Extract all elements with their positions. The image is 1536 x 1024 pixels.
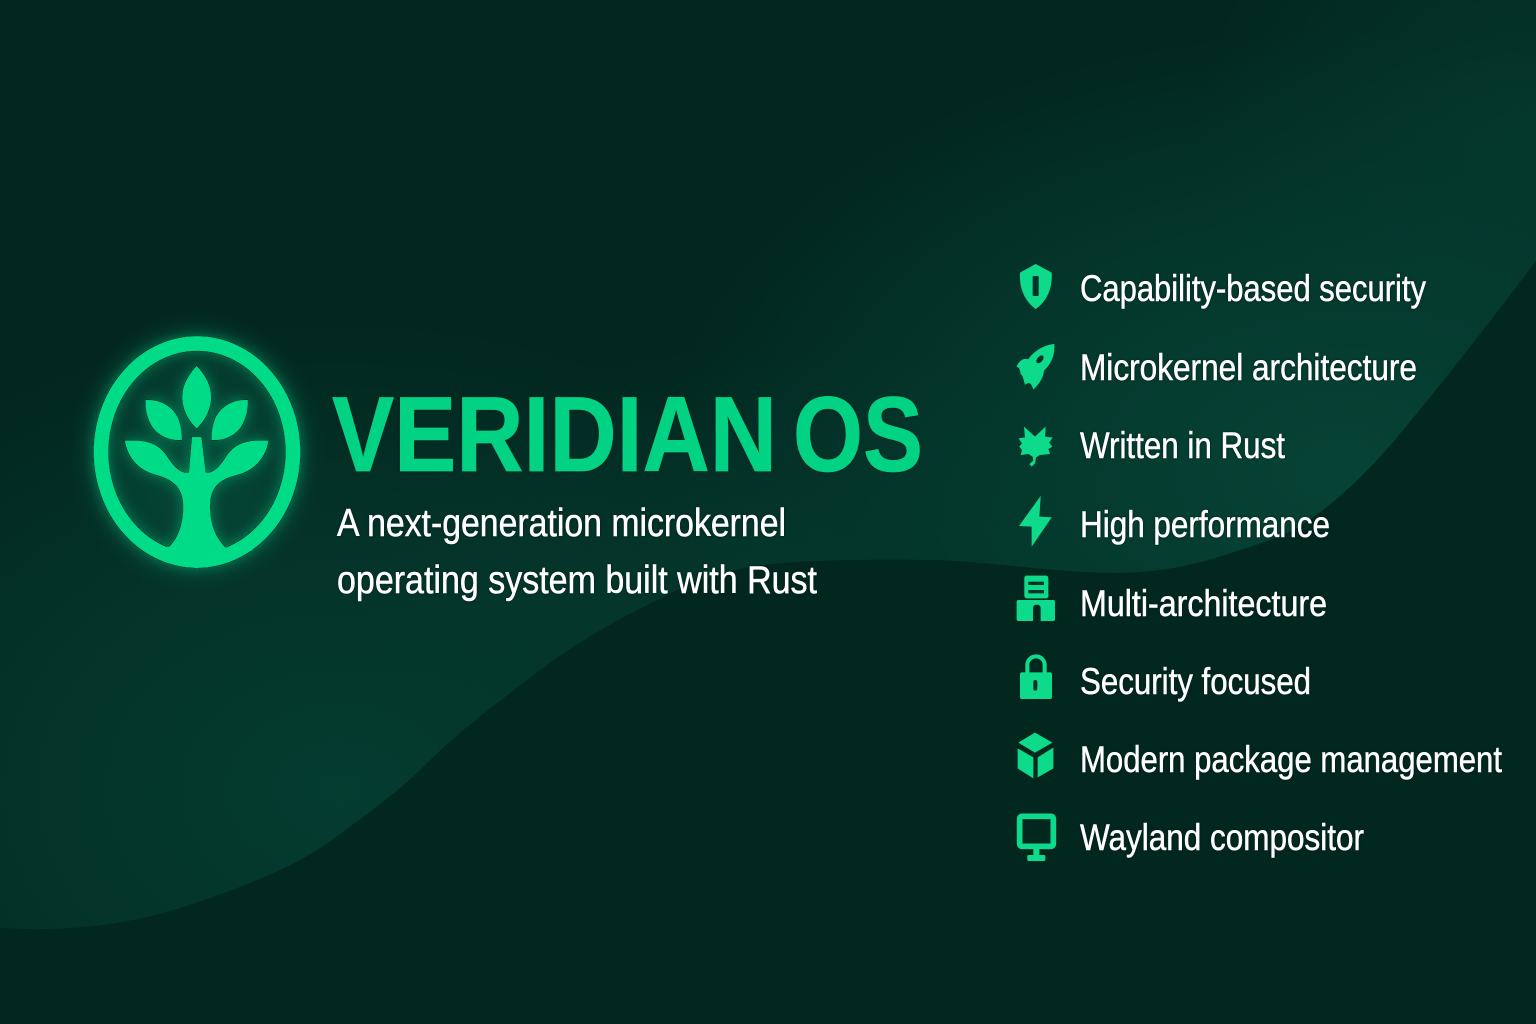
icon: multi-architecture blocks bbox=[1017, 576, 1055, 621]
logo: tree in ring bbox=[69, 310, 325, 594]
icon: rocket bbox=[1017, 344, 1054, 389]
title: OS bbox=[793, 374, 923, 494]
feature: wayland compositor: Wayland compositor bbox=[1080, 817, 1364, 858]
icon: leaf bbox=[1019, 427, 1053, 467]
feature: microkernel architecture: Microkernel architecture bbox=[1080, 347, 1417, 388]
subtitle: A next-generation microkernel bbox=[337, 502, 786, 545]
feature: security focused: Security focused bbox=[1080, 661, 1311, 702]
icon: monitor bbox=[1020, 816, 1053, 861]
feature list bbox=[1017, 264, 1503, 861]
subtitle: operating system built with Rust bbox=[337, 559, 817, 602]
subtitle bbox=[337, 502, 817, 602]
icon: padlock bbox=[1020, 656, 1052, 699]
icon: lightning bolt bbox=[1019, 496, 1052, 547]
icon: package cube bbox=[1018, 733, 1053, 778]
title: VERIDIAN bbox=[332, 374, 777, 494]
logo ring bbox=[101, 344, 293, 560]
icon: shield bbox=[1020, 264, 1052, 309]
feature: capability-based security: Capability-based security bbox=[1080, 268, 1426, 309]
tree with leaves bbox=[125, 366, 268, 568]
feature: multi-architecture: Multi-architecture bbox=[1080, 583, 1327, 624]
feature: written in rust: Written in Rust bbox=[1080, 425, 1286, 466]
feature: high performance: High performance bbox=[1080, 504, 1330, 545]
